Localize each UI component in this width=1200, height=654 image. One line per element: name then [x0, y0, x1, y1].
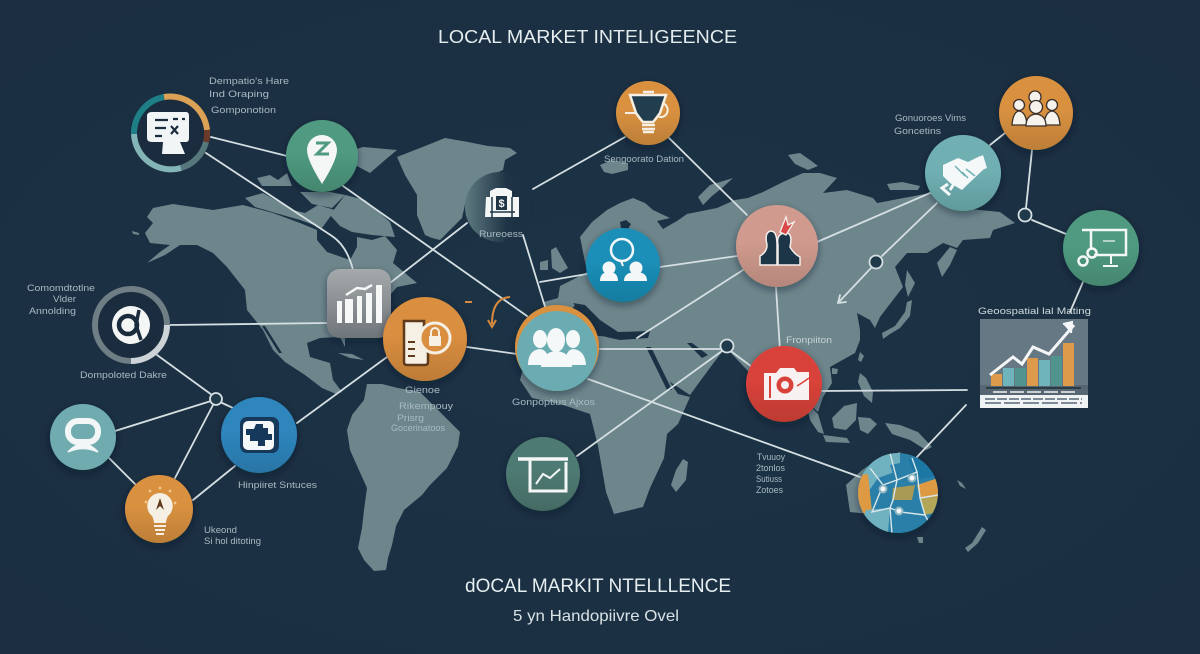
- caribbean: [338, 353, 364, 360]
- south america: [347, 384, 460, 571]
- novaya zemlya: [698, 178, 733, 205]
- label: ocean block: 2tonlos: [756, 463, 785, 474]
- africa: [520, 335, 690, 514]
- philippines: [858, 373, 873, 403]
- label: top right block: [894, 113, 966, 137]
- tasmania nz: [917, 537, 923, 543]
- sakhalin: [905, 270, 915, 297]
- icon: salmon silhouettes: [736, 205, 818, 287]
- label: ocean block: Zotoes: [756, 485, 783, 496]
- label: top right block: Goncetins: [894, 126, 941, 137]
- label: top left block: Ind Oraping: [209, 89, 269, 100]
- icon: teal face: [50, 404, 116, 470]
- label: south america block: Gocerinatoos: [391, 423, 445, 434]
- red sea: [646, 347, 672, 390]
- inland seas: [262, 220, 708, 390]
- label: south america block: [391, 385, 453, 434]
- icon: blue people: [586, 228, 660, 302]
- label: ocean block: Sutiuss: [756, 474, 782, 485]
- label: south america block: Rikempouy: [399, 401, 453, 412]
- icon: blue puzzle: [221, 397, 297, 473]
- sulawesi: [858, 417, 877, 434]
- icon: dark green chart: [506, 437, 580, 511]
- madagascar: [671, 459, 688, 492]
- icon: dollar building: [465, 172, 535, 242]
- label: ukeond: Si hol ditoting: [204, 536, 261, 547]
- label: left block: Annolding: [29, 306, 76, 317]
- kamchatka: [937, 247, 957, 277]
- mediterranean and black sea: [573, 303, 650, 340]
- label: south america block: Gienoe: [405, 385, 440, 396]
- label: hinpiiret: Hinpiiret Sntuces: [238, 480, 317, 491]
- label: top right block: Gonuoroes Vims: [895, 113, 966, 124]
- north america: [145, 204, 417, 394]
- eurasia: [544, 173, 1015, 412]
- label: ocean block: [756, 452, 785, 496]
- icon: bar chart tile: [327, 269, 391, 338]
- orange curved arrow: [465, 297, 510, 327]
- icon: regional map globe: [858, 452, 938, 534]
- sumatra java: [806, 402, 824, 434]
- label: sengoorato: Sengoorato Dation: [604, 154, 684, 165]
- icon: green location pin: [286, 120, 358, 192]
- title: LOCAL MARKET INTELIGEENCE: [438, 26, 737, 47]
- icon: orange crowd: [999, 76, 1073, 150]
- iceland: [600, 160, 628, 174]
- borneo: [832, 403, 857, 430]
- japan: [882, 300, 912, 339]
- gulf of california: [262, 326, 282, 353]
- label: geospatial: Geoospatial lal Mating: [978, 306, 1091, 317]
- label: left block: Vlder: [53, 294, 76, 305]
- chart panel: geospatial mapping: [980, 319, 1088, 408]
- ellesmere: [353, 147, 397, 173]
- persian gulf: [687, 343, 708, 358]
- icon: orange bulb: [125, 475, 193, 543]
- icon: red camera: [746, 346, 822, 422]
- icon: central group circle: [515, 305, 599, 391]
- arctic islands: [788, 153, 818, 170]
- icon: orange document lock: [383, 297, 467, 381]
- baltic: [620, 220, 631, 229]
- label: gonpoptius: Gonpoptius Ajxos: [512, 397, 595, 408]
- connector lines: [109, 133, 1083, 500]
- taiwan hainan: [858, 352, 864, 362]
- label: rureoess: Rureoess: [479, 229, 523, 240]
- label: top left block: [209, 76, 289, 116]
- footer title: dOCAL MARKIT NTELLLENCE: [465, 575, 731, 597]
- label: ukeond: [204, 525, 261, 547]
- world map: [132, 138, 1015, 571]
- label: top left block: Dempatio's Hare: [209, 76, 289, 87]
- icon: chat ring: [133, 96, 207, 170]
- label: ukeond: Ukeond: [204, 525, 237, 536]
- arctic archipelago: [245, 193, 335, 228]
- icon: dollar building: $: [498, 198, 505, 210]
- label: dompoloted: Dompoloted Dakre: [80, 370, 167, 381]
- uk islands: [551, 247, 568, 273]
- icon: teal handshake: [925, 135, 1001, 211]
- icon: orange trophy: [616, 81, 680, 145]
- footer subtitle: 5 yn Handopiivre Ovel: [513, 608, 679, 625]
- australia: [846, 452, 930, 515]
- new guinea: [885, 423, 932, 450]
- label: top left block: Gomponotion: [211, 105, 276, 116]
- label: fronpiiton: Fronpiiton: [786, 335, 832, 346]
- label: left block: [27, 283, 95, 317]
- icon: alpha ring: [95, 289, 167, 361]
- icon: green monitor: [1063, 210, 1139, 286]
- label: left block: Comomdtotlne: [27, 283, 95, 294]
- label: south america block: Prisrg: [397, 413, 424, 424]
- baffin region islands: [330, 195, 395, 237]
- label: ocean block: Tvuuoy: [757, 452, 785, 463]
- junction nodes: [210, 208, 1032, 405]
- greenland: [397, 138, 517, 240]
